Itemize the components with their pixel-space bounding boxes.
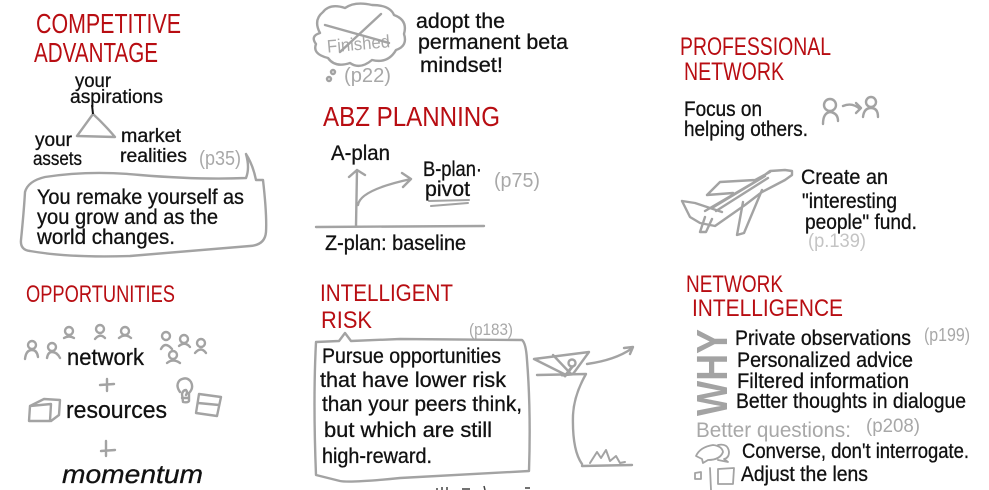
triangle diagram: aspirations (70, 87, 163, 108)
callout: remake yourself: You remake yourself as (37, 186, 244, 209)
icon: people crowd (25, 325, 206, 363)
text: focus on helping others: Focus on (684, 98, 762, 121)
heading: professional network: NETWORK (684, 58, 784, 86)
text: adopt the permanent beta mindset: mindset! (420, 54, 503, 77)
list: why reasons: Private observations (735, 327, 911, 350)
triangle diagram: your (35, 130, 73, 151)
icon: thought cloud with crossed-out Finished: Finished (326, 31, 391, 57)
callout: pursue opportunities (314, 333, 530, 482)
callout: pursue opportunities: high-reward. (322, 445, 432, 468)
chart: plan arrows: pivot (425, 178, 470, 201)
page reference p22: (p22) (344, 65, 391, 87)
text: network: network (67, 344, 144, 370)
heading: network intelligence: NETWORK (686, 271, 783, 298)
callout: pursue opportunities: Pursue opportunities (322, 345, 501, 368)
callout: remake yourself: you grow and as the (37, 206, 218, 229)
icon: person helping person (823, 97, 878, 124)
heading: intelligent risk: INTELLIGENT (320, 280, 453, 307)
icon: light bulb (178, 378, 192, 402)
panel: opportunities (25, 281, 221, 489)
triangle diagram: realities (120, 146, 187, 167)
icon: thought cloud with crossed-out Finished (314, 4, 405, 81)
panel: competitive advantage (21, 8, 266, 256)
heading: intelligent risk (320, 280, 453, 334)
heading: competitive advantage (34, 8, 181, 68)
page reference p183: (p183) (469, 320, 513, 339)
text: interesting people fund (801, 166, 917, 234)
page reference p35: (p35) (199, 148, 241, 170)
chart: plan arrows (316, 142, 484, 255)
text: interesting people fund: "interesting (802, 190, 897, 213)
list: why reasons: Better thoughts in dialogue (736, 390, 966, 413)
heading: professional network: PROFESSIONAL (680, 33, 831, 61)
rotated label: WHY: WHY (688, 329, 737, 416)
heading: competitive advantage: COMPETITIVE (36, 8, 181, 39)
panel: professional network (680, 33, 917, 252)
text: focus on helping others: helping others. (684, 118, 808, 141)
plus sign (101, 441, 115, 456)
icon: speech bubbles (696, 445, 729, 463)
callout: remake yourself (21, 154, 266, 256)
heading: ABZ planning: ABZ PLANNING (323, 101, 500, 132)
triangle diagram: your (75, 71, 112, 92)
text: momentum: momentum (62, 459, 203, 489)
chart: plan arrows: A-plan (331, 142, 390, 165)
chart: plan arrows: B-plan· (423, 158, 482, 181)
heading: network intelligence: INTELLIGENCE (692, 295, 843, 322)
panel: intelligent risk (314, 280, 633, 490)
panel: network intelligence (686, 271, 970, 490)
triangle diagram (33, 71, 187, 170)
text: interesting people fund: people" fund. (805, 211, 917, 234)
subheading: better questions (696, 416, 920, 442)
plus sign (100, 379, 114, 391)
chart: plan arrows: Z-plan: baseline (325, 232, 466, 255)
subheading: better questions: (p208) (866, 416, 920, 437)
callout: pursue opportunities: that have lower risk (320, 369, 507, 392)
heading: intelligent risk: RISK (321, 307, 372, 334)
text: adopt the permanent beta mindset (416, 10, 568, 77)
heading: professional network (680, 33, 831, 86)
icon: book (196, 394, 221, 416)
page reference p139: (p.139) (808, 231, 866, 252)
list: why reasons: Personalized advice (737, 349, 913, 372)
heading: network intelligence (686, 271, 843, 322)
triangle diagram: assets (33, 149, 82, 170)
callout: pursue opportunities: but which are still (324, 419, 492, 442)
text: adjust the lens: Adjust the lens (741, 463, 868, 486)
icon: box (29, 399, 60, 421)
list: why reasons: Filtered information (737, 370, 909, 393)
text: interesting people fund: Create an (801, 166, 888, 189)
text: adopt the permanent beta mindset: permanent beta (418, 31, 568, 54)
callout: remake yourself: world changes. (36, 226, 175, 249)
text: adopt the permanent beta mindset: adopt the (416, 10, 505, 33)
cut-off handwriting at bottom edge (437, 486, 530, 490)
triangle diagram: market (121, 126, 182, 147)
text: resources: resources (66, 397, 167, 424)
icon: lens squares (695, 468, 734, 490)
page reference p199: (p199) (924, 325, 970, 345)
icon: jet plane (682, 170, 792, 235)
heading: competitive advantage: ADVANTAGE (34, 37, 158, 68)
heading: opportunities: OPPORTUNITIES (26, 281, 175, 308)
icon: person hang gliding off a cliff (534, 347, 633, 466)
page reference p75: (p75) (494, 170, 540, 192)
panel: permanent beta (314, 4, 568, 87)
subheading: better questions: Better questions: (696, 419, 851, 442)
list: why reasons (735, 327, 966, 413)
text: focus on helping others (684, 98, 808, 141)
callout: pursue opportunities: than your peers think, (322, 393, 522, 416)
panel: ABZ planning (316, 101, 540, 255)
